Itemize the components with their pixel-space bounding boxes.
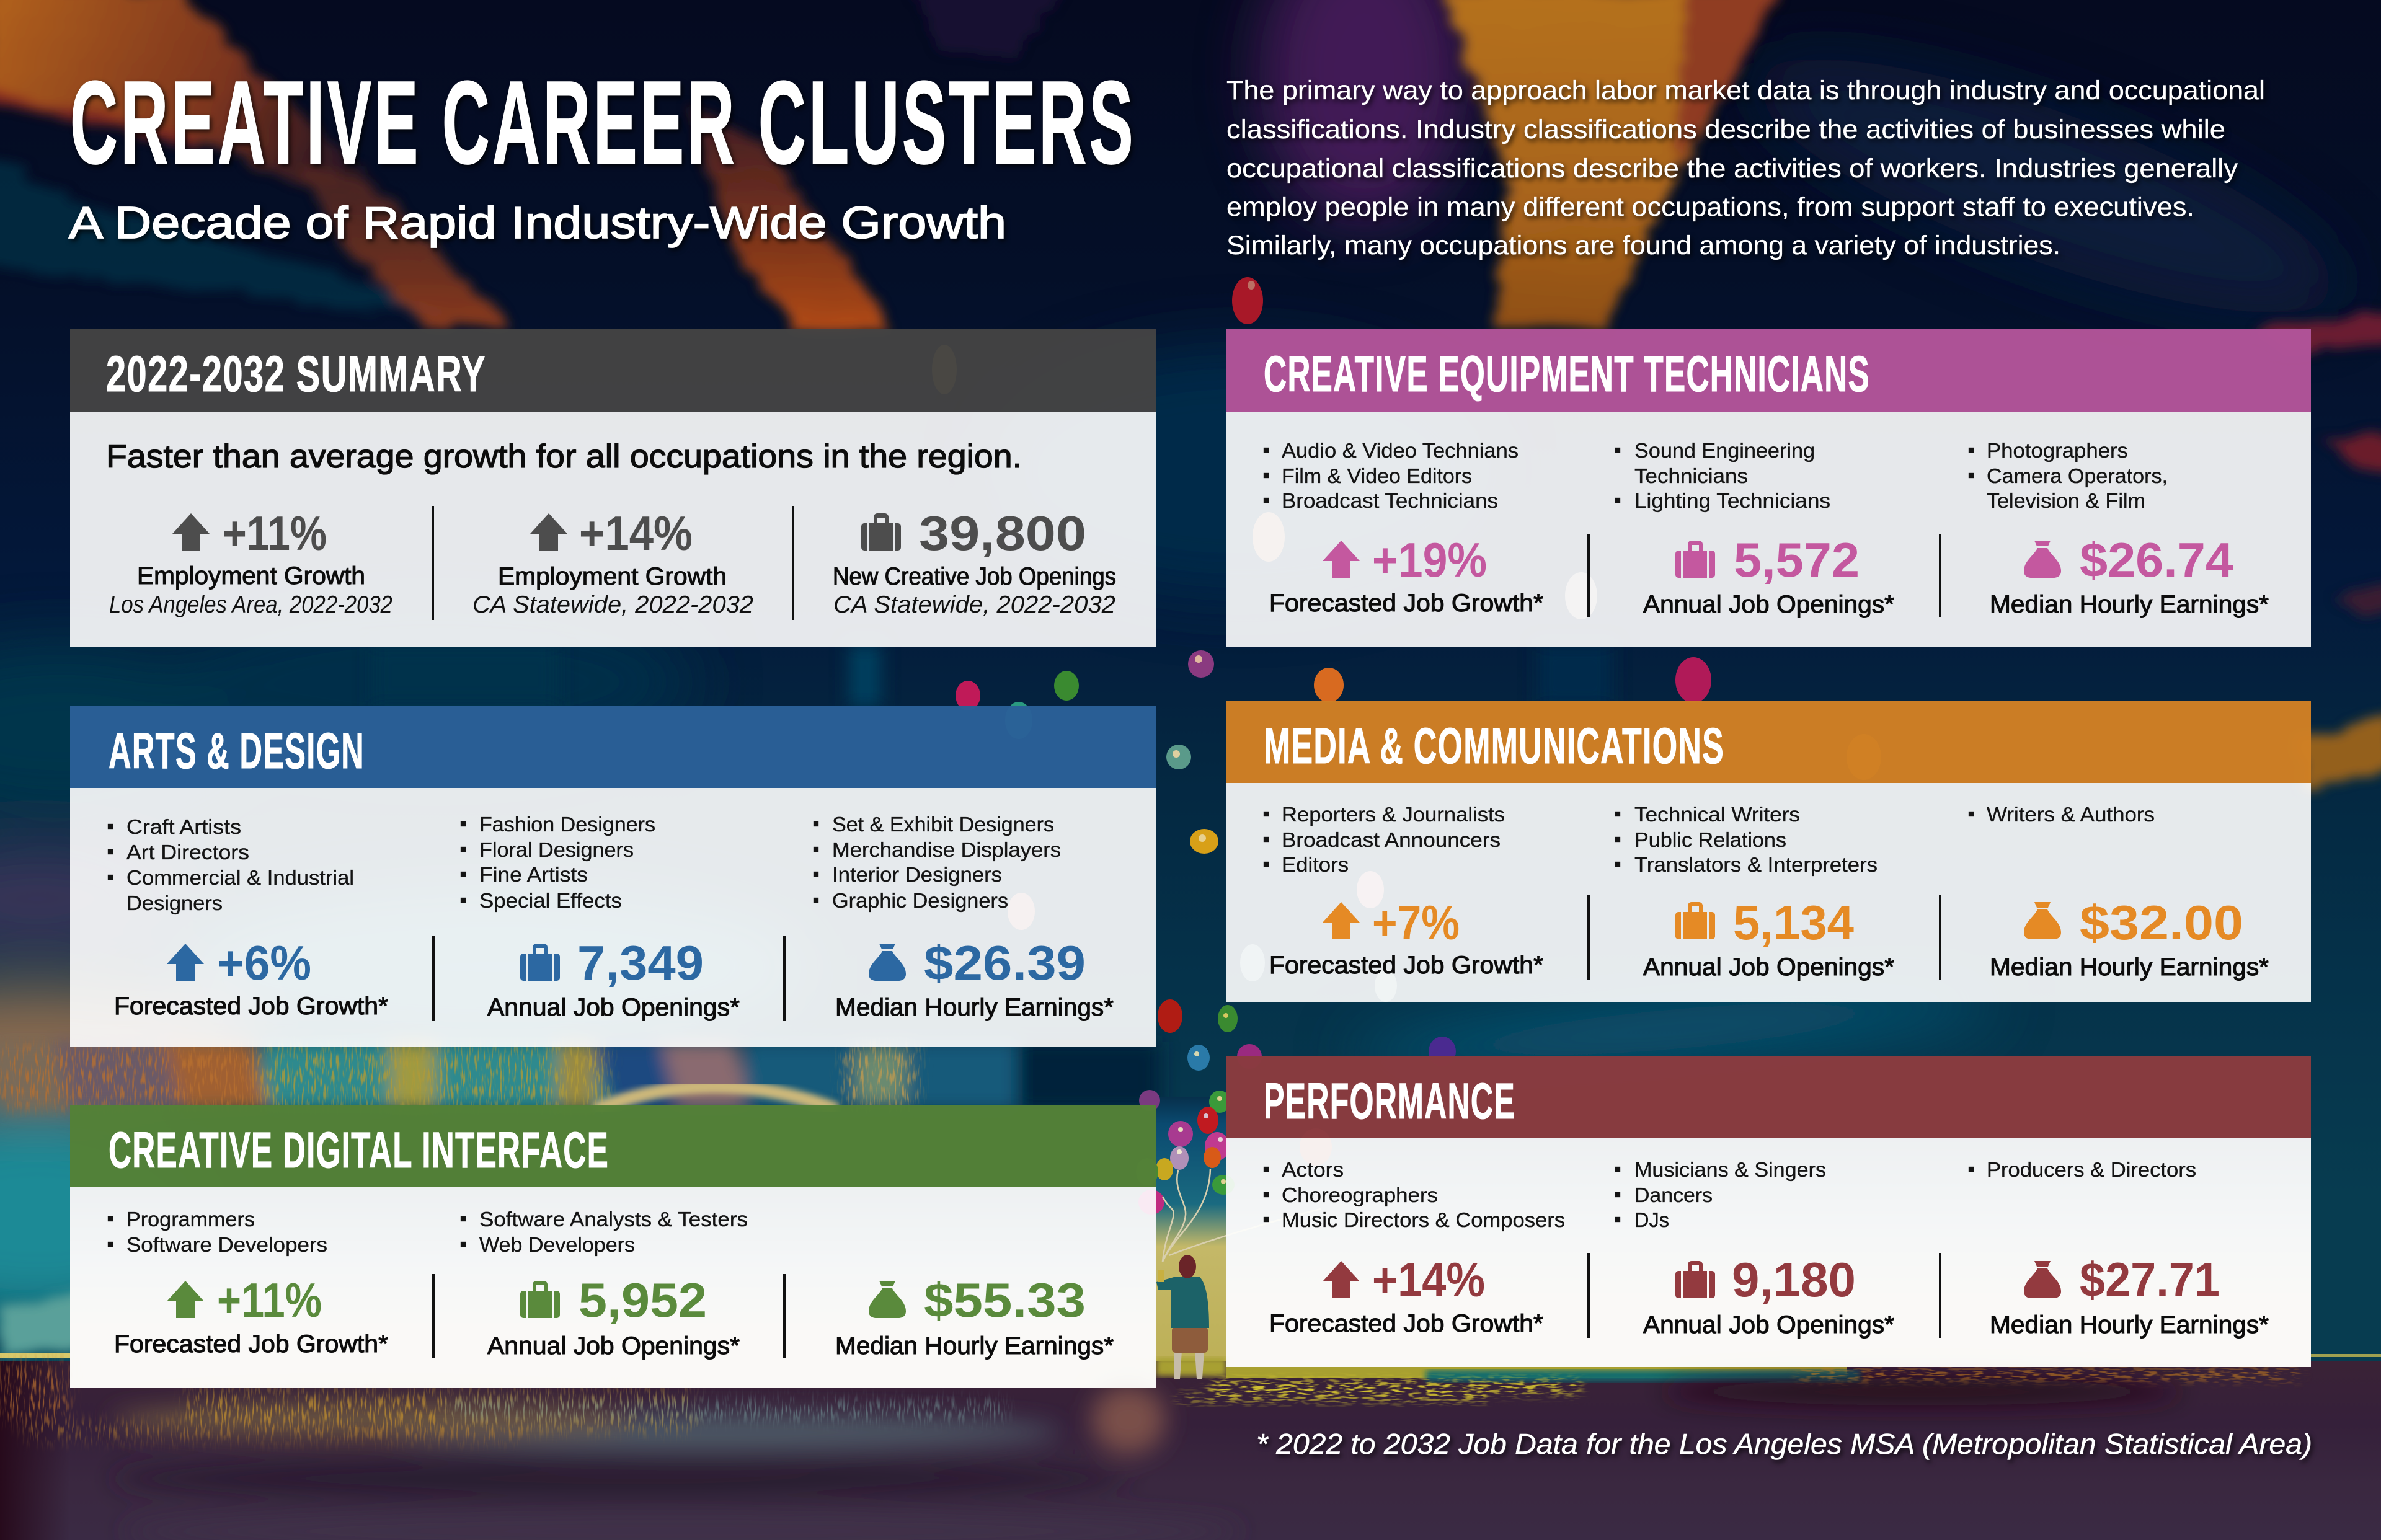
occupation list: column 2: Sound Engineering bbox=[1634, 439, 1815, 462]
occupation list: column 2: Translators & Interpreters bbox=[1634, 853, 1878, 876]
title: CREATIVE CAREER CLUSTERS bbox=[70, 57, 1136, 188]
occupation list: column 3: Photographers bbox=[1987, 439, 2128, 462]
stat: hourly earnings: $55.33 bbox=[924, 1273, 1086, 1327]
panel: creative equipment technicians bbox=[1226, 329, 2311, 647]
stat: +11% Los Angeles: Los Angeles Area, 2022-2032 bbox=[109, 591, 392, 618]
stat: job openings: 5,952 bbox=[579, 1273, 707, 1327]
heading: arts and design: ARTS & DESIGN bbox=[109, 723, 365, 779]
occupation list: column 1: Software Developers bbox=[126, 1233, 327, 1256]
occupation list: column 2: Technical Writers bbox=[1634, 803, 1800, 826]
occupation list: column 1 bbox=[1264, 1158, 1565, 1231]
occupation list: column 3: Merchandise Displayers bbox=[832, 838, 1061, 861]
stat: +14% California: +14% bbox=[579, 506, 693, 560]
stat: 39,800 openings: New Creative Job Openings bbox=[833, 563, 1116, 590]
occupation list: column 1: Choreographers bbox=[1282, 1184, 1438, 1206]
stat: job openings: Annual Job Openings* bbox=[487, 1332, 740, 1360]
intro paragraph: classifications. Industry classifications describe the activities of businesses while bbox=[1226, 115, 2225, 144]
occupation list: column 1: Designers bbox=[126, 892, 223, 914]
occupation list: column 2 bbox=[1615, 803, 1878, 876]
stat: hourly earnings: Median Hourly Earnings* bbox=[1990, 591, 2269, 618]
panel: arts and design bbox=[70, 706, 1156, 1047]
stat: +14% California bbox=[472, 506, 753, 618]
stat: hourly earnings: Median Hourly Earnings* bbox=[1990, 954, 2269, 981]
stat: hourly earnings bbox=[1990, 895, 2269, 981]
stat: job growth: Forecasted Job Growth* bbox=[1269, 590, 1543, 617]
occupation list: column 2 bbox=[1615, 1158, 1826, 1231]
stat: job growth: Forecasted Job Growth* bbox=[1269, 952, 1543, 979]
intro paragraph bbox=[1226, 76, 2265, 260]
stat: job openings: 9,180 bbox=[1732, 1252, 1856, 1307]
stat: hourly earnings: Median Hourly Earnings* bbox=[835, 1332, 1114, 1360]
occupation list: column 1: Film & Video Editors bbox=[1282, 464, 1472, 487]
footnote: * 2022 to 2032 Job Data for the Los Angeles MSA (Metropolitan Statistical Area) bbox=[1256, 1428, 2312, 1460]
occupation list: column 1 bbox=[108, 815, 354, 914]
occupation list: column 1: Audio & Video Technians bbox=[1282, 439, 1519, 462]
occupation list: column 2: DJs bbox=[1634, 1208, 1669, 1231]
stat: job growth: Forecasted Job Growth* bbox=[114, 993, 388, 1020]
occupation list: column 2: Floral Designers bbox=[479, 838, 634, 861]
stat: hourly earnings bbox=[835, 936, 1114, 1021]
occupation list: column 1: Broadcast Technicians bbox=[1282, 489, 1498, 512]
stat: 39,800 openings: CA Statewide, 2022-2032 bbox=[833, 591, 1115, 618]
stat: job growth bbox=[1269, 895, 1543, 979]
occupation list: column 3 bbox=[1969, 439, 2168, 512]
stat: job growth: Forecasted Job Growth* bbox=[1269, 1310, 1543, 1337]
stat: job openings: Annual Job Openings* bbox=[1643, 591, 1894, 618]
stat: hourly earnings: Median Hourly Earnings* bbox=[1990, 1311, 2269, 1339]
stat: job openings: 5,134 bbox=[1733, 895, 1854, 950]
panel: performance bbox=[1226, 1056, 2311, 1367]
occupation list: column 1: Commercial & Industrial bbox=[126, 866, 354, 889]
panel: creative digital interface bbox=[70, 1105, 1156, 1388]
occupation list: column 3: Producers & Directors bbox=[1987, 1158, 2196, 1181]
occupation list: column 2: Web Developers bbox=[479, 1233, 635, 1256]
panel: media and communications bbox=[1226, 701, 2311, 1002]
stat: hourly earnings: $32.00 bbox=[2080, 895, 2243, 950]
occupation list: column 2: Fashion Designers bbox=[479, 813, 655, 836]
stat: hourly earnings: $26.74 bbox=[2080, 533, 2233, 587]
stat: job openings: Annual Job Openings* bbox=[1643, 1311, 1894, 1339]
balloons bbox=[932, 277, 1881, 1215]
occupation list: column 3: Camera Operators, bbox=[1987, 464, 2168, 487]
occupation list: column 1 bbox=[108, 1208, 327, 1256]
stat: job openings: 7,349 bbox=[577, 936, 704, 990]
occupation list: column 2: Lighting Technicians bbox=[1634, 489, 1830, 512]
occupation list: column 2: Special Effects bbox=[479, 889, 622, 912]
stat: job growth: +19% bbox=[1372, 533, 1487, 587]
occupation list: column 1 bbox=[1264, 439, 1519, 512]
occupation list: column 1: Art Directors bbox=[126, 841, 249, 864]
stat: job growth bbox=[1269, 533, 1543, 617]
occupation list: column 1: Editors bbox=[1282, 853, 1349, 876]
occupation list: column 1: Music Directors & Composers bbox=[1282, 1208, 1565, 1231]
occupation list: column 1: Reporters & Journalists bbox=[1282, 803, 1505, 826]
occupation list: column 1: Programmers bbox=[126, 1208, 255, 1231]
balloon strings bbox=[1163, 1169, 1321, 1262]
stat: job openings: Annual Job Openings* bbox=[1643, 954, 1894, 981]
stat: job growth: +11% bbox=[217, 1273, 322, 1327]
stat: job openings: 5,572 bbox=[1734, 533, 1860, 587]
stat: job growth bbox=[114, 1273, 388, 1358]
stat: job growth bbox=[1269, 1252, 1543, 1337]
occupation list: column 2 bbox=[461, 1208, 748, 1256]
summary statement: Faster than average growth for all occupations in the region. bbox=[106, 438, 1022, 475]
occupation list: column 3: Set & Exhibit Designers bbox=[832, 813, 1054, 836]
occupation list: column 2: Musicians & Singers bbox=[1634, 1158, 1826, 1181]
heading: summary: 2022-2032 SUMMARY bbox=[106, 346, 486, 402]
stat: +14% California: Employment Growth bbox=[498, 563, 727, 590]
stat: 39,800 openings: 39,800 bbox=[919, 506, 1086, 560]
stat: hourly earnings bbox=[1990, 533, 2269, 618]
heading: creative equipment technicians: CREATIVE EQUIPMENT TECHNICIANS bbox=[1264, 346, 1870, 402]
stat: +11% Los Angeles: +11% bbox=[223, 506, 327, 560]
stat: hourly earnings: Median Hourly Earnings* bbox=[835, 994, 1114, 1021]
stat: job openings: Annual Job Openings* bbox=[487, 994, 740, 1021]
person holding balloons bbox=[1156, 1255, 1209, 1379]
occupation list: column 2 bbox=[1615, 439, 1830, 512]
stat: job openings bbox=[1643, 895, 1894, 981]
stat: hourly earnings bbox=[835, 1273, 1114, 1360]
heading: media and communications: MEDIA & COMMUNICATIONS bbox=[1264, 718, 1724, 774]
occupation list: column 3: Graphic Designers bbox=[832, 889, 1008, 912]
occupation list: column 3: Writers & Authors bbox=[1987, 803, 2155, 826]
intro paragraph: The primary way to approach labor market data is through industry and occupational bbox=[1226, 76, 2265, 105]
subtitle: A Decade of Rapid Industry-Wide Growth bbox=[69, 198, 1006, 248]
intro paragraph: occupational classifications describe the activities of workers. Industries generally bbox=[1226, 154, 2238, 184]
occupation list: column 3: Interior Designers bbox=[832, 863, 1002, 886]
stat: job growth: +6% bbox=[217, 936, 311, 990]
stat: job growth: Forecasted Job Growth* bbox=[114, 1330, 388, 1358]
stat: +11% Los Angeles bbox=[109, 506, 392, 618]
occupation list: column 2: Fine Artists bbox=[479, 863, 588, 886]
occupation list: column 3: Television & Film bbox=[1987, 489, 2145, 512]
stat: job growth: +14% bbox=[1372, 1252, 1485, 1307]
stat: +11% Los Angeles: Employment Growth bbox=[137, 562, 365, 590]
stat: job openings bbox=[487, 1273, 740, 1360]
intro paragraph: employ people in many different occupations, from support staff to executives. bbox=[1226, 192, 2194, 222]
stat: hourly earnings: $26.39 bbox=[924, 936, 1086, 990]
occupation list: column 1: Craft Artists bbox=[126, 815, 241, 838]
panel: 2022-2032 summary bbox=[70, 329, 1156, 647]
stat: 39,800 openings bbox=[833, 506, 1116, 618]
heading: performance: PERFORMANCE bbox=[1264, 1073, 1515, 1130]
occupation list: column 2: Software Analysts & Testers bbox=[479, 1208, 748, 1231]
intro paragraph: Similarly, many occupations are found among a variety of industries. bbox=[1226, 231, 2060, 260]
stat: job growth bbox=[114, 936, 388, 1020]
heading: creative digital interface: CREATIVE DIGITAL INTERFACE bbox=[109, 1122, 609, 1179]
occupation list: column 2: Technicians bbox=[1634, 464, 1748, 487]
stat: job growth: +7% bbox=[1372, 895, 1460, 950]
occupation list: column 2: Dancers bbox=[1634, 1184, 1713, 1206]
occupation list: column 3 bbox=[814, 813, 1061, 912]
stat: hourly earnings bbox=[1990, 1252, 2269, 1339]
occupation list: column 2 bbox=[461, 813, 655, 912]
occupation list: column 1: Broadcast Announcers bbox=[1282, 828, 1501, 851]
stat: job openings bbox=[1643, 533, 1894, 618]
stat: job openings bbox=[487, 936, 740, 1021]
occupation list: column 2: Public Relations bbox=[1634, 828, 1786, 851]
occupation list: column 1 bbox=[1264, 803, 1505, 876]
stat: +14% California: CA Statewide, 2022-2032 bbox=[472, 591, 753, 618]
occupation list: column 1: Actors bbox=[1282, 1158, 1344, 1181]
stat: hourly earnings: $27.71 bbox=[2080, 1252, 2220, 1307]
stat: job openings bbox=[1643, 1252, 1894, 1339]
